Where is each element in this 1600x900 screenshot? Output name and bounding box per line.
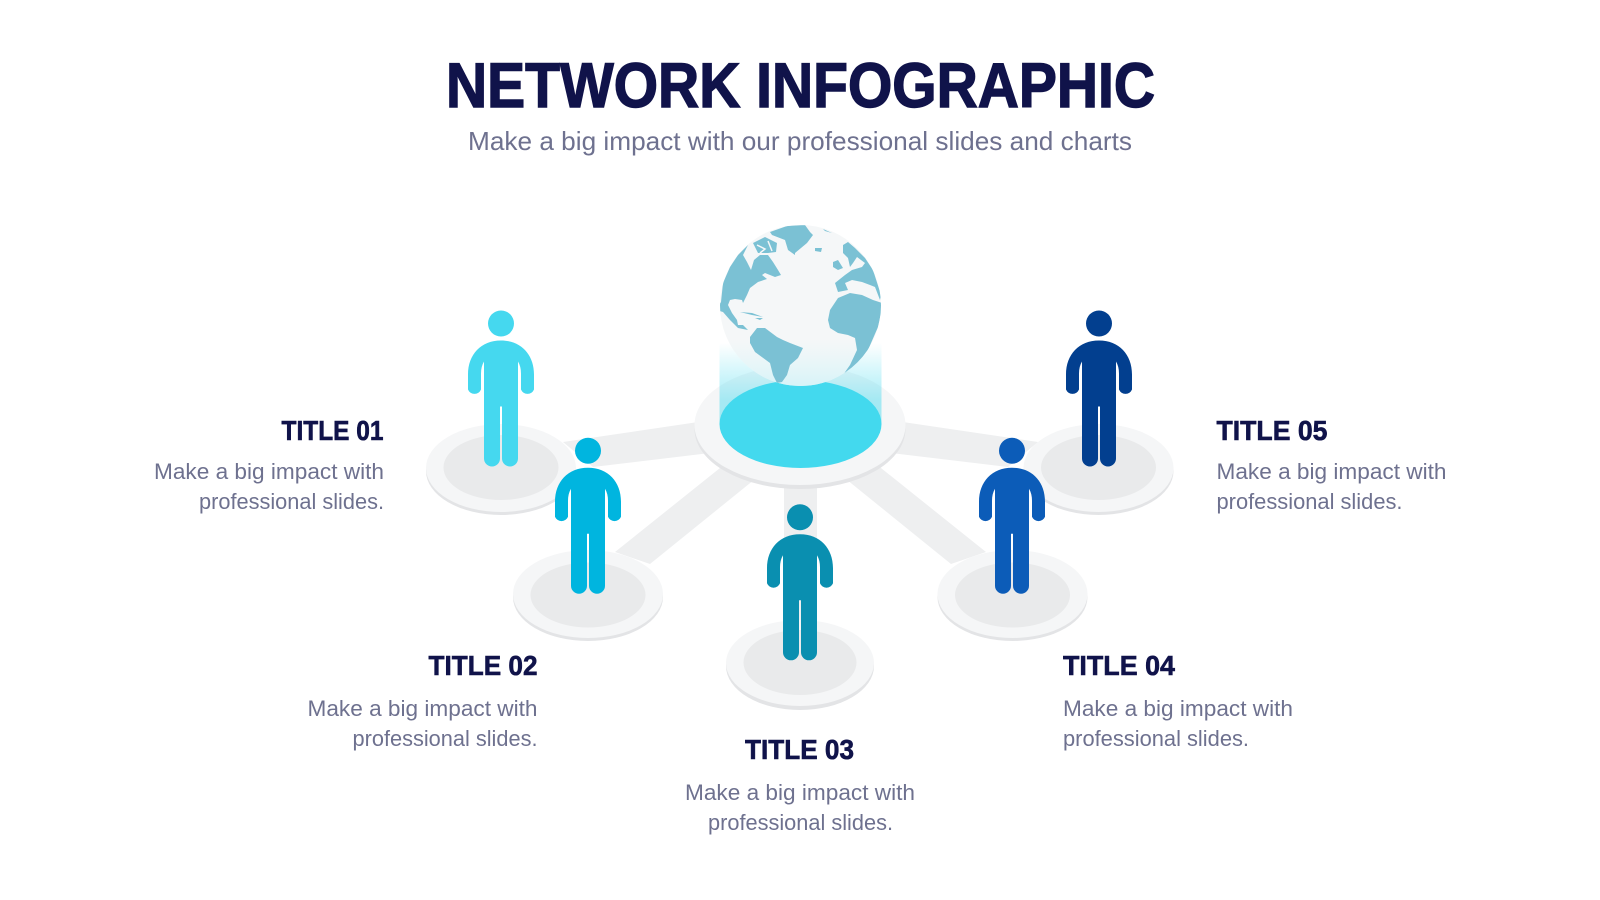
label: title 01: Make a big impact with (154, 459, 384, 484)
continents (716, 225, 882, 383)
label: title 03 (685, 734, 915, 835)
label: title 02 (308, 650, 538, 751)
label: title 04: TITLE 04 (1063, 650, 1175, 681)
label: title 04 (1063, 650, 1293, 751)
connector bars (563, 421, 1038, 640)
hologram cylinder (720, 343, 882, 468)
person 2 (555, 438, 621, 594)
node 4 disc (938, 550, 1088, 641)
central platform (694, 365, 906, 489)
label: title 03: professional slides. (708, 810, 893, 835)
label: title 04: Make a big impact with (1063, 696, 1293, 721)
label: title 02: Make a big impact with (308, 696, 538, 721)
label: title 02: professional slides. (352, 726, 538, 751)
label: title 03: TITLE 03 (745, 734, 854, 765)
label: title 01: TITLE 01 (282, 415, 384, 446)
node 5 disc (1024, 424, 1174, 515)
person 5 (1066, 310, 1132, 466)
label: title 03: Make a big impact with (685, 780, 915, 805)
subtitle: Make a big impact with our professional slides and charts (468, 126, 1132, 156)
person 4 (979, 438, 1045, 594)
person 3 (767, 504, 833, 660)
label: title 02: TITLE 02 (428, 650, 538, 681)
label: title 05 (1216, 415, 1446, 514)
label: title 05: professional slides. (1216, 489, 1402, 514)
label: title 05: Make a big impact with (1216, 459, 1446, 484)
label: title 05: TITLE 05 (1216, 415, 1328, 446)
globe (716, 225, 882, 386)
label: title 04: professional slides. (1063, 726, 1249, 751)
title: NETWORK INFOGRAPHIC (446, 51, 1155, 121)
arctic island cracks (757, 241, 772, 253)
person 1 (468, 310, 534, 466)
node 1 disc (426, 424, 576, 515)
node 3 disc (726, 620, 874, 710)
node 2 disc (513, 550, 663, 641)
label: title 01 (154, 415, 384, 514)
label: title 01: professional slides. (199, 489, 384, 514)
